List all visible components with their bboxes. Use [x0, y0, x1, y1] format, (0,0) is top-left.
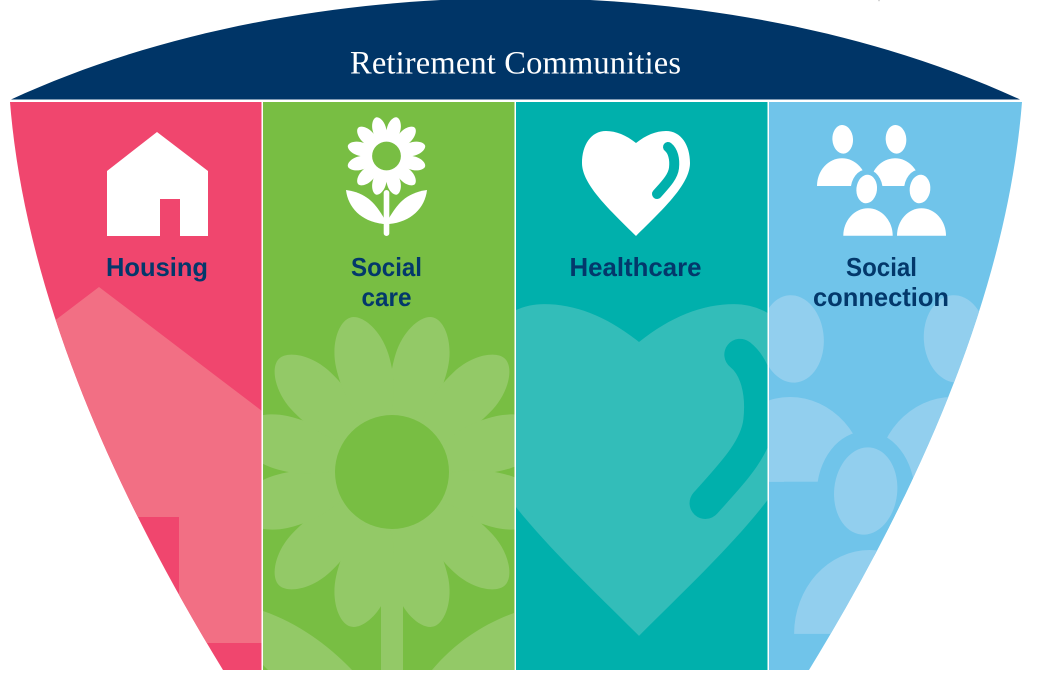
panel: healthcare [516, 102, 768, 670]
panel: housing [10, 102, 262, 670]
dome: Retirement Communities banner [11, 0, 1020, 100]
large faded house [56, 287, 262, 643]
icon: house [107, 132, 208, 236]
social connection background [769, 102, 1022, 670]
housing background [10, 102, 262, 670]
title: Retirement Communities [350, 46, 681, 82]
panel: social care [263, 102, 514, 670]
large faded flower [263, 317, 514, 670]
large faded people [769, 295, 979, 634]
heading line: Social: Social [846, 252, 917, 282]
heading line: Social: Social [351, 252, 422, 282]
healthcare background [516, 102, 768, 670]
icon: heart [582, 131, 690, 236]
large faded heart [516, 304, 768, 636]
social care background [263, 102, 514, 670]
panel: social connection [769, 102, 1022, 670]
heading: Housing: Housing [106, 252, 208, 282]
dome shape [11, 0, 1020, 100]
heading line: care: care [362, 282, 412, 312]
icon: people [817, 124, 946, 236]
heading line: connection: connection [813, 282, 949, 312]
heading: Social connection [813, 252, 949, 312]
heading: Healthcare: Healthcare [570, 252, 702, 282]
icon: flower [346, 116, 427, 236]
heading: Social care [351, 252, 422, 312]
